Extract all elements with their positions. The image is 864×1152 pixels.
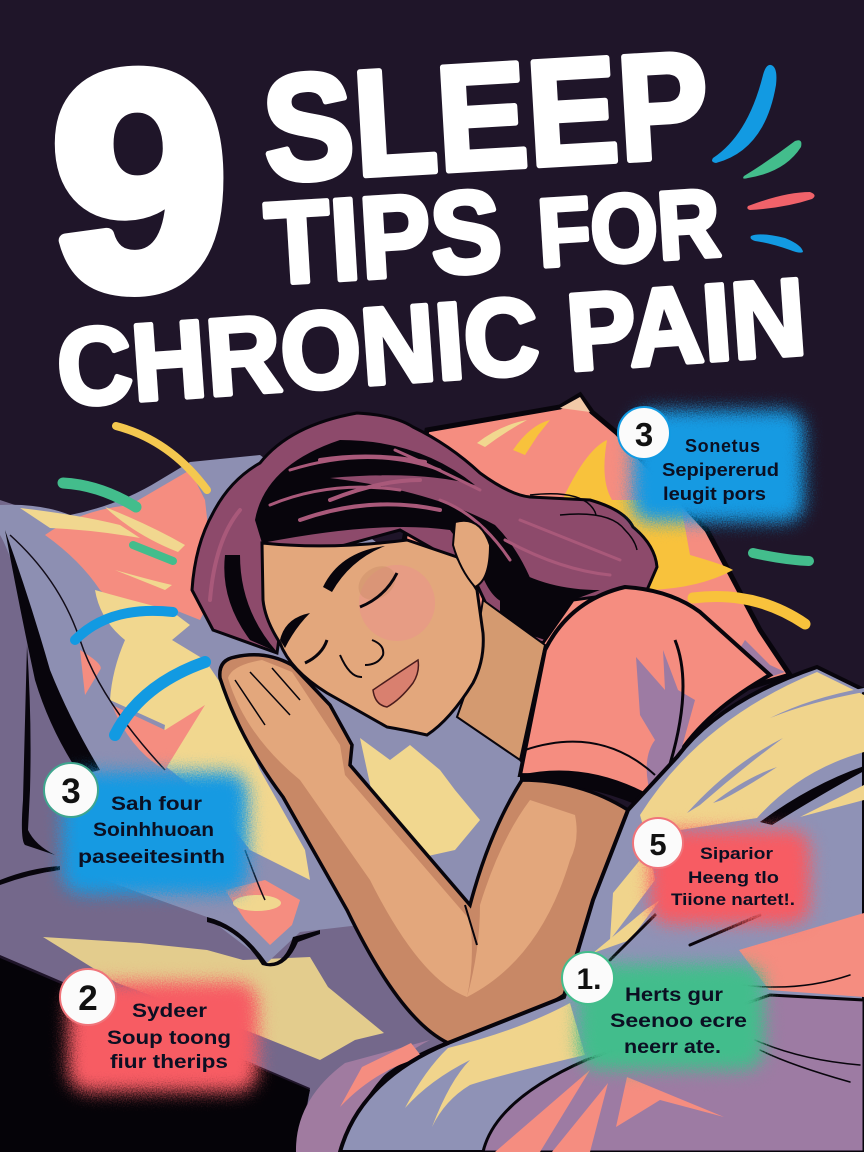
callout: bottom right green: 1.: [576, 963, 602, 996]
sheet yellow fold: [43, 937, 384, 1060]
blob: [650, 830, 810, 924]
blanket yellow low: [593, 785, 864, 953]
hair black shadows: [224, 440, 600, 652]
callout text: fiur therips: [110, 1052, 228, 1073]
blanket black streak: [760, 766, 864, 825]
blob: [578, 964, 764, 1070]
pillow yellow marks: [477, 420, 527, 447]
neck: [457, 600, 545, 760]
elbow crease: [465, 905, 477, 945]
shirt purple shading: [636, 650, 695, 800]
blanket grey streaks: [687, 688, 864, 813]
finger lines: [235, 668, 300, 725]
callout text: leugit pors: [663, 484, 766, 504]
eyebrow lower: [280, 613, 310, 648]
thin fold lines: [10, 535, 265, 900]
eyelash upper: [360, 573, 397, 607]
callout: top right: 3: [635, 416, 653, 453]
number badge: [60, 969, 116, 1025]
blob: [632, 410, 804, 522]
title word: TIPS: TIPS: [262, 165, 505, 309]
callout text: Sepipererud: [662, 460, 779, 480]
back pillow: [400, 395, 790, 720]
blob: [62, 772, 248, 894]
blanket black folds: [340, 915, 860, 1152]
number badge: [618, 407, 670, 459]
hair: [192, 413, 657, 653]
pillow yellow main: [95, 590, 310, 880]
coral band streak: [340, 1043, 422, 1107]
callout text: Herts gur: [625, 985, 724, 1006]
pillow purple corner: [730, 640, 785, 682]
callout: bottom left: [60, 969, 258, 1092]
callout text: Soinhhuoan: [93, 820, 214, 841]
callout: left blue: [44, 763, 248, 894]
blanket yellow: [610, 672, 864, 940]
front pillow: [0, 455, 525, 963]
eyelash lower: [305, 640, 327, 663]
callout text: Siparior: [700, 844, 773, 863]
callout text: paseeitesinth: [78, 847, 225, 868]
lower yellow streak: [405, 1003, 585, 1127]
pillow coral patch: [45, 470, 215, 620]
callout: bottom left: 2: [78, 979, 98, 1018]
coral streaks: [495, 1070, 724, 1152]
hair highlights: [210, 450, 620, 600]
eyelids: [352, 559, 402, 607]
pillow coral lower: [80, 650, 205, 770]
pillow coral corner: [225, 880, 300, 945]
accent dashes near title: [712, 65, 815, 253]
callout text: Sydeer: [132, 1001, 208, 1022]
callout: right red: 5: [649, 827, 667, 862]
face: [262, 521, 490, 735]
forearm highlight: [228, 660, 577, 997]
sleeve seam: [525, 742, 655, 775]
blanket: [296, 667, 864, 1152]
callout text: [107, 1001, 231, 1073]
purple drape right: [483, 995, 864, 1152]
left purple band: [296, 1040, 430, 1152]
loose hair strands: [530, 494, 637, 550]
number badge: [44, 763, 98, 817]
callout text: [610, 985, 747, 1058]
lips: [373, 660, 418, 707]
eyebrow upper: [323, 546, 385, 592]
callout text: Sah four: [111, 794, 203, 815]
callout text: [671, 844, 795, 909]
callout text: [78, 794, 225, 868]
title: [51, 10, 810, 430]
title line: CHRONIC PAIN: CHRONIC PAIN: [53, 256, 810, 430]
sleeve cuff: [520, 770, 652, 812]
pillow tip highlight: [560, 397, 590, 412]
black lower corner: [0, 958, 310, 1152]
callout text: [662, 436, 779, 504]
arm and hand: [220, 655, 628, 1043]
callout text: Tiione nartet!.: [671, 890, 795, 909]
callout: bottom right green: [562, 952, 764, 1070]
number badge: [633, 818, 683, 868]
callout text: Soup toong: [107, 1028, 231, 1049]
blob: [68, 982, 258, 1092]
cheek: [359, 565, 435, 641]
title number 9: 9: [51, 10, 228, 353]
nose: [340, 640, 383, 677]
callout text: Heeng tlo: [688, 868, 779, 887]
coral right patch: [739, 913, 864, 997]
ear: [453, 521, 490, 587]
t-shirt: [520, 587, 770, 812]
callout: right red: [633, 818, 810, 924]
pillow right yellow: [360, 738, 480, 860]
callout: top right: [618, 407, 804, 522]
pillow black folds: [0, 530, 320, 966]
callout text: Sonetus: [685, 436, 760, 456]
callout text: Seenoo ecre: [610, 1011, 747, 1032]
accent dashes right of pillow: [693, 553, 809, 624]
number badge: [562, 952, 614, 1004]
callout: left blue: 3: [61, 772, 81, 811]
callout text: neerr ate.: [624, 1037, 721, 1058]
title word: FOR: FOR: [535, 170, 723, 287]
accent dashes on pillow: [63, 426, 207, 735]
sleeve crease: [665, 640, 683, 780]
pillow yellow dab: [233, 895, 281, 911]
pillow yellow top streaks: [20, 507, 185, 590]
bed base: [0, 500, 600, 1152]
title line: SLEEP: SLEEP: [258, 20, 713, 213]
